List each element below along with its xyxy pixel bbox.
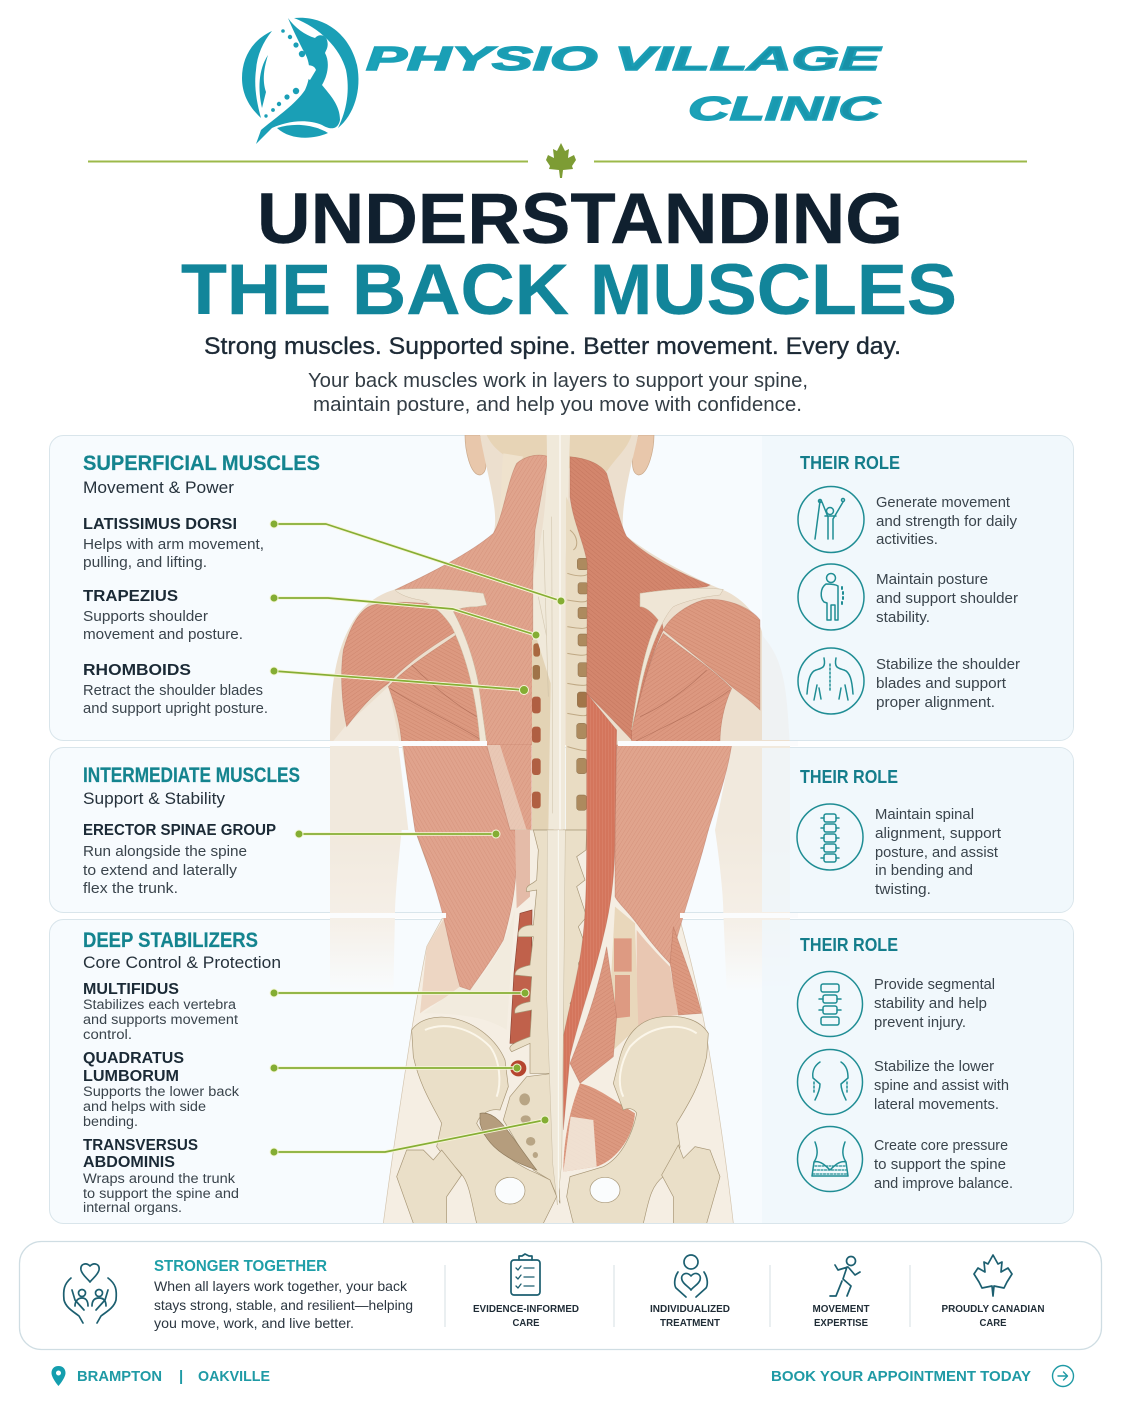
panel: intermediate muscles text xyxy=(83,764,300,897)
panel: deep stabilizers text: internal organs. xyxy=(83,1200,182,1215)
panel: intermediate role: Maintain spinal xyxy=(875,807,974,823)
right latissimus xyxy=(615,745,732,963)
stronger together text: you move, work, and live better. xyxy=(154,1315,354,1331)
feature: movement expertise xyxy=(812,1256,870,1329)
panel: superficial role: and strength for daily xyxy=(876,514,1018,530)
title: THE BACK MUSCLES xyxy=(181,251,957,330)
footer locations xyxy=(52,1366,270,1386)
footer locations: OAKVILLE xyxy=(198,1368,270,1385)
panel: deep role: Create core pressure xyxy=(874,1138,1008,1154)
feature: evidence-informed care xyxy=(473,1254,579,1329)
left trap lower strip xyxy=(487,745,532,830)
panel: deep role: Provide segmental xyxy=(874,977,995,993)
head base xyxy=(487,435,632,472)
footer call to action xyxy=(771,1366,1074,1386)
panel: superficial role xyxy=(798,453,1020,714)
logo mark xyxy=(242,18,358,144)
subtitle: Strong muscles. Supported spine. Better movement. Every day. xyxy=(204,333,901,360)
icon: spine xyxy=(797,804,863,870)
stronger together text: stays strong, stable, and resilient—helping xyxy=(154,1297,413,1313)
panel: deep stabilizers text: bending. xyxy=(83,1114,138,1129)
right ilium xyxy=(567,1016,708,1223)
panel: deep role: prevent injury. xyxy=(874,1015,966,1031)
panel: deep stabilizers text: Core Control & Protection xyxy=(83,954,281,972)
logo xyxy=(242,18,882,144)
panel: deep role: stability and help xyxy=(874,996,987,1012)
ears xyxy=(465,435,486,475)
feature: movement expertise: EXPERTISE xyxy=(814,1317,868,1329)
feature: proudly canadian care: PROUDLY CANADIAN xyxy=(942,1303,1044,1315)
panel: superficial muscles text: RHOMBOIDS xyxy=(83,662,191,679)
left scapular tendon xyxy=(395,589,487,743)
panel: deep stabilizers text xyxy=(83,929,281,1215)
central fascia lower xyxy=(547,830,565,1205)
feature: evidence-informed care: CARE xyxy=(512,1317,540,1329)
icon: hands holding heart and people xyxy=(64,1264,116,1323)
right role panels xyxy=(762,436,1073,1223)
icon: location pin xyxy=(52,1366,66,1386)
feature: proudly canadian care: CARE xyxy=(980,1317,1006,1329)
logo wordmark xyxy=(366,40,882,127)
panel: intermediate role: twisting. xyxy=(875,882,931,898)
right deltoid xyxy=(663,599,760,710)
intro text: Your back muscles work in layers to support your spine, xyxy=(308,370,808,392)
left trapezius xyxy=(395,455,548,745)
central fascia xyxy=(534,435,570,830)
panel: deep stabilizers text: Wraps around the trunk xyxy=(83,1171,235,1186)
title xyxy=(181,180,957,330)
icon: core xyxy=(798,1126,862,1192)
panel backgrounds xyxy=(50,436,1074,1224)
panel: superficial role: THEIR ROLE xyxy=(800,453,900,473)
icon: arrow circle xyxy=(1052,1366,1074,1386)
panel: intermediate muscles text: ERECTOR SPINAE GROUP xyxy=(83,822,276,839)
panel: deep role: Stabilize the lower xyxy=(874,1059,994,1075)
panel: deep role: THEIR ROLE xyxy=(800,935,898,955)
logo wordmark: CLINIC xyxy=(688,90,882,127)
right spine bones xyxy=(566,497,589,830)
panel: superficial muscles text: TRAPEZIUS xyxy=(83,588,178,605)
right deep lumbar xyxy=(637,930,678,1027)
left vertebrae xyxy=(510,830,553,1073)
icon: lower back xyxy=(798,1050,862,1114)
panel: superficial role: proper alignment. xyxy=(876,695,995,711)
feature: individualized treatment xyxy=(650,1255,730,1329)
panel: intermediate muscles text: INTERMEDIATE MUSCLES xyxy=(83,764,300,787)
panel: deep stabilizers text: TRANSVERSUS xyxy=(83,1137,198,1154)
panel: deep stabilizers text: and helps with side xyxy=(83,1099,206,1114)
panel: deep stabilizers text: ABDOMINIS xyxy=(83,1154,175,1171)
obturator foramina xyxy=(495,1177,620,1204)
right femur xyxy=(662,1145,720,1223)
panel: deep stabilizers text: control. xyxy=(83,1027,132,1042)
footer locations: | xyxy=(179,1368,183,1385)
panel: superficial role: Generate movement xyxy=(876,495,1010,511)
panel: superficial muscles text: LATISSIMUS DORSI xyxy=(83,516,237,533)
intro text: maintain posture, and help you move with confidence. xyxy=(313,394,802,416)
panel: deep stabilizers text: Stabilizes each vertebra xyxy=(83,997,237,1012)
panel: superficial role: blades and support xyxy=(876,676,1006,692)
left infraspinatus xyxy=(388,633,486,743)
panel: intermediate role xyxy=(797,767,1001,898)
panel: deep stabilizers text: to support the spine and xyxy=(83,1186,239,1201)
right spine bones xyxy=(563,830,587,1043)
left neck cream band xyxy=(503,454,523,463)
footer call to action: BOOK YOUR APPOINTMENT TODAY xyxy=(771,1368,1031,1385)
right scapular tendon xyxy=(632,588,723,730)
panel: superficial muscles text xyxy=(83,452,320,717)
panel: intermediate role: alignment, support xyxy=(875,826,1001,842)
divider with maple leaf xyxy=(88,143,1027,178)
panel: superficial muscles text: SUPERFICIAL MUSCLES xyxy=(83,452,320,475)
right infraspinatus xyxy=(632,633,732,743)
anatomy illustration xyxy=(330,435,790,1223)
panel: superficial muscles text: Retract the shoulder blades xyxy=(83,683,263,699)
panel: superficial role: and support shoulder xyxy=(876,591,1018,607)
torso translucent xyxy=(383,830,733,1223)
panel: deep stabilizers text: Supports the lower back xyxy=(83,1084,239,1099)
right gluteal xyxy=(563,1083,635,1172)
panel: superficial muscles text: movement and posture. xyxy=(83,627,243,643)
panel: deep role: and improve balance. xyxy=(874,1176,1013,1192)
left deep muscle strip xyxy=(510,910,532,1043)
right erector spinae xyxy=(563,693,617,1130)
footer locations: BRAMPTON xyxy=(77,1368,162,1385)
icon: maple leaf xyxy=(546,143,576,178)
panel: deep role: lateral movements. xyxy=(874,1097,999,1113)
icon: posture xyxy=(798,564,864,630)
panel: deep stabilizers text: QUADRATUS xyxy=(83,1050,184,1067)
panel: intermediate muscles text: to extend and laterally xyxy=(83,863,238,879)
panel: intermediate role: in bending and xyxy=(875,863,973,879)
panel: deep stabilizers text: LUMBORUM xyxy=(83,1068,179,1085)
panel: deep role xyxy=(798,935,1013,1192)
left ilium xyxy=(412,1017,557,1223)
panel: intermediate muscles text: Support & Stability xyxy=(83,790,226,808)
left latissimus xyxy=(403,745,516,990)
panel: intermediate muscles text: Run alongside the spine xyxy=(83,844,247,860)
panel: deep stabilizers text: DEEP STABILIZERS xyxy=(83,929,258,952)
sacrum xyxy=(503,1073,560,1203)
panel: deep stabilizers text: and supports movement xyxy=(83,1012,238,1027)
stronger together text xyxy=(154,1258,413,1331)
stronger together text: When all layers work together, your back xyxy=(154,1278,408,1294)
stronger together text: STRONGER TOGETHER xyxy=(154,1258,327,1275)
panel: superficial muscles text: pulling, and lifting. xyxy=(83,555,207,571)
panel seams xyxy=(330,741,798,918)
icon: arms raised xyxy=(798,486,864,552)
panel: deep role: spine and assist with xyxy=(874,1078,1009,1094)
panel: deep role: to support the spine xyxy=(874,1157,1006,1173)
panel: deep stabilizers text: MULTIFIDUS xyxy=(83,981,179,998)
skin xyxy=(330,435,790,745)
right trapezius xyxy=(570,457,710,743)
feature: movement expertise: MOVEMENT xyxy=(812,1303,870,1315)
feature: evidence-informed care: EVIDENCE-INFORMED xyxy=(473,1303,579,1315)
intro text xyxy=(308,370,808,416)
leader lines xyxy=(270,520,565,1156)
panel: superficial role: stability. xyxy=(876,610,930,626)
icon: upper back xyxy=(798,648,864,714)
panel: superficial muscles text: Movement & Power xyxy=(83,479,235,497)
arms fading xyxy=(330,830,402,966)
title: UNDERSTANDING xyxy=(257,180,903,259)
panel: superficial muscles text: and support upright posture. xyxy=(83,701,268,717)
left sciatic notch xyxy=(480,1113,537,1170)
panel: intermediate role: THEIR ROLE xyxy=(800,767,898,787)
bottom banner xyxy=(20,1242,1102,1350)
panel: intermediate muscles text: flex the trunk. xyxy=(83,881,178,897)
feature: individualized treatment: TREATMENT xyxy=(660,1317,721,1329)
lower body xyxy=(330,693,790,1223)
panel: superficial role: activities. xyxy=(876,532,938,548)
logo wordmark: PHYSIO VILLAGE xyxy=(366,40,882,77)
panel: superficial role: Stabilize the shoulder xyxy=(876,657,1020,673)
left spine bones xyxy=(532,640,552,830)
feature: proudly canadian care xyxy=(942,1255,1044,1329)
arms xyxy=(330,687,790,830)
left femur xyxy=(397,1150,462,1223)
panel: superficial muscles text: Supports shoulder xyxy=(83,609,208,625)
feature: individualized treatment: INDIVIDUALIZED xyxy=(650,1303,730,1315)
left deltoid xyxy=(342,602,458,727)
upper body xyxy=(330,435,790,830)
right oblique xyxy=(670,927,702,1015)
panel: superficial muscles text: Helps with arm movement, xyxy=(83,537,264,553)
panel: intermediate role: posture, and assist xyxy=(875,845,998,861)
icon: vertebrae xyxy=(798,972,862,1036)
panel: superficial role: Maintain posture xyxy=(876,572,988,588)
right psoas xyxy=(570,947,617,1083)
left waist tissue xyxy=(420,917,460,1013)
